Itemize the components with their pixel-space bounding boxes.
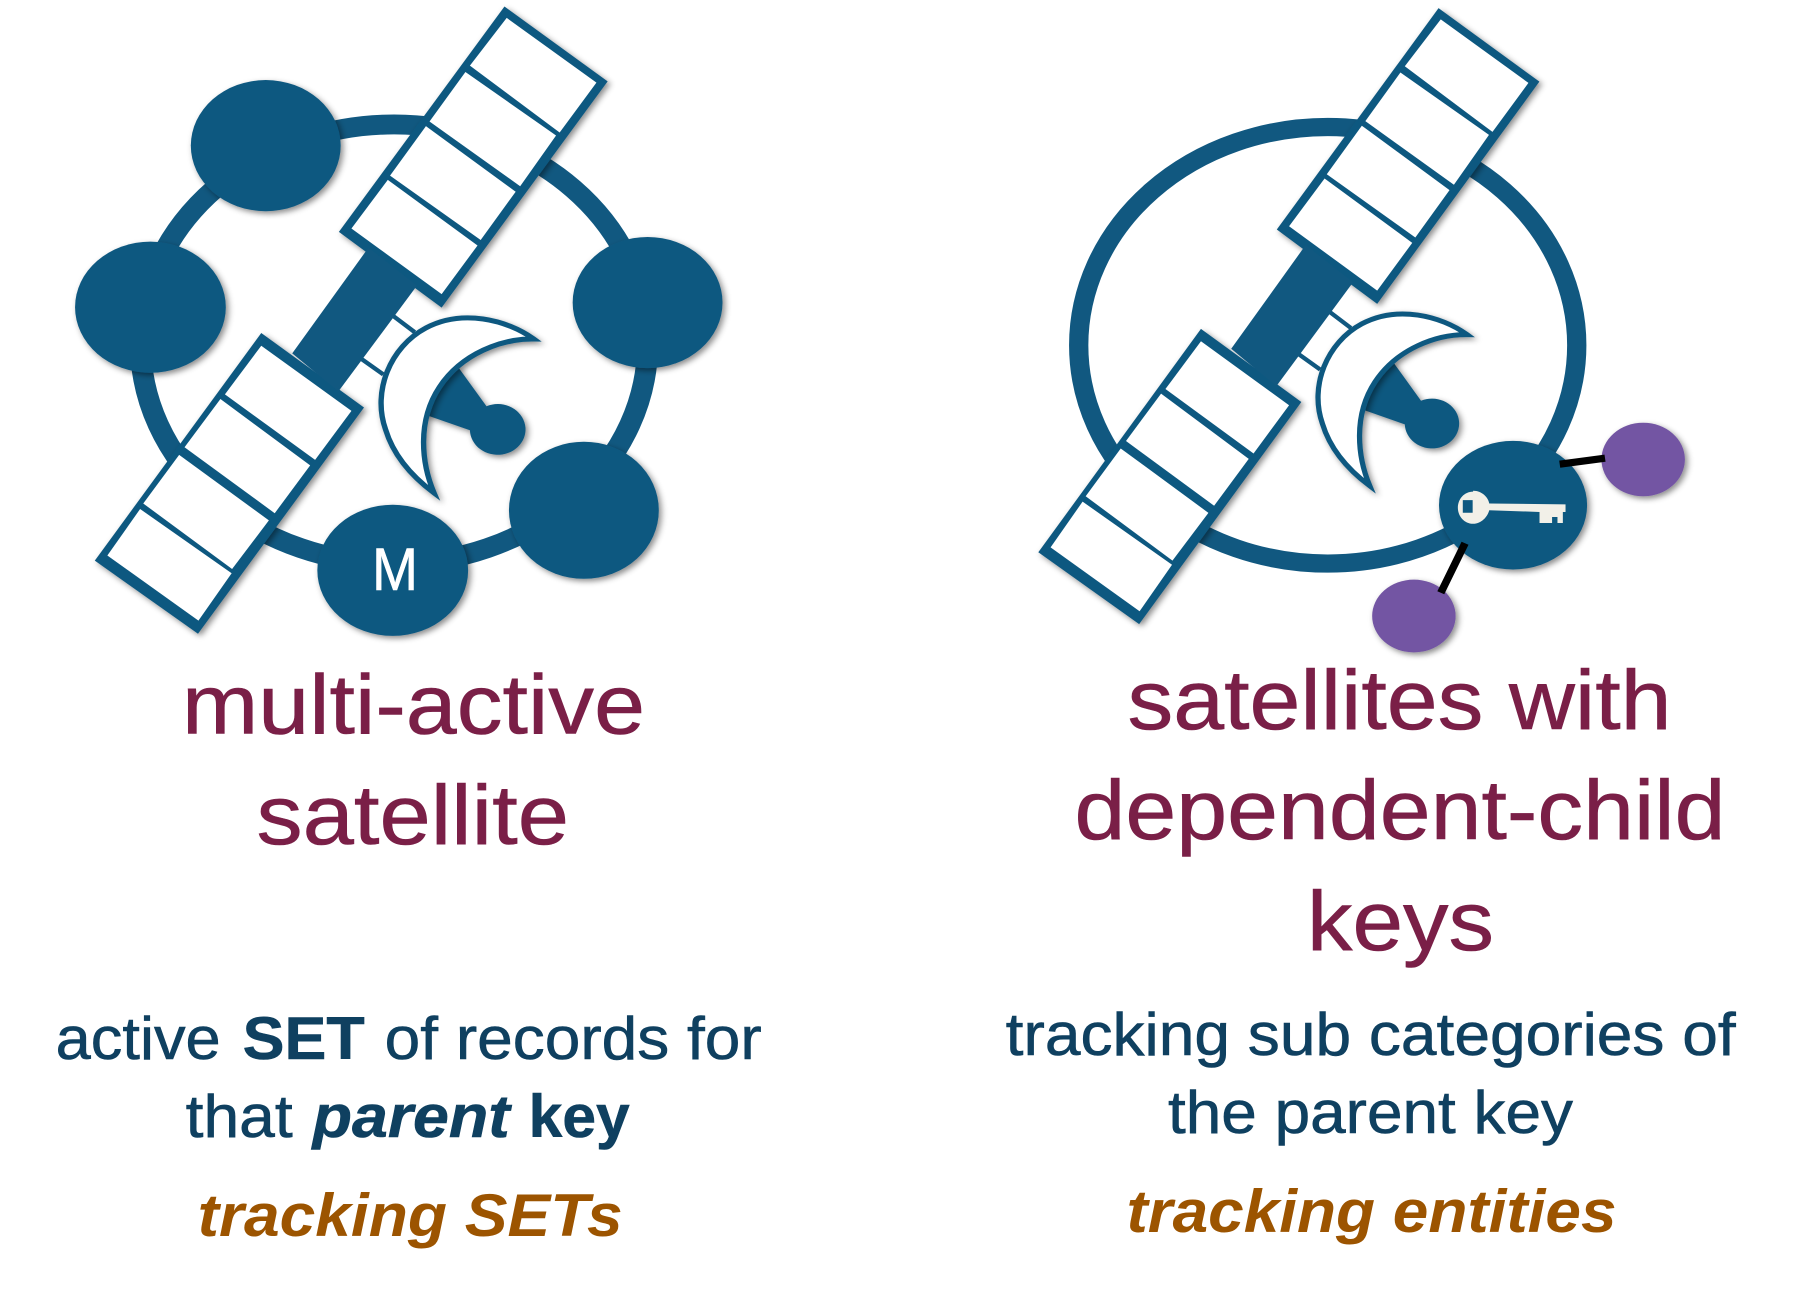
dish [381,318,534,493]
tagline: tracking entities: tracking entities [1126,1178,1616,1245]
satellite body [95,6,608,634]
description: tracking sub categories: tracking sub categories of [1006,1001,1736,1068]
heading: satellites with dependent-child keys [1074,653,1726,968]
icon: satellite with dependent-child key [1038,8,1685,652]
panel: multi-active satellite [56,6,762,1249]
description: active set of records: parent [311,1083,513,1150]
key circle [1439,441,1587,569]
tagline: tracking SETs: tracking SETs [198,1182,623,1249]
description: active set of records: key [529,1083,630,1150]
satellite body [1038,8,1539,624]
purple child circles [1372,423,1685,652]
heading: multi-active satellite [182,658,645,862]
dish feed [425,366,526,455]
heading: multi-active satellite: multi-active [182,658,645,752]
heading: satellites with dependent-child keys: dependent-child [1074,763,1726,857]
icon: multi-active satellite [75,6,723,636]
heading: satellites with dependent-child keys: keys [1307,874,1494,968]
description: tracking sub categories [1006,1001,1736,1146]
orbit ring [1079,127,1577,564]
heading: satellites with dependent-child keys: satellites with [1128,653,1672,747]
description: active set of records: SET [243,1005,365,1072]
description: active set of records [56,1005,762,1150]
icon: key [1458,491,1566,524]
panel: satellites with dependent-child keys [1006,8,1736,1245]
letter M: M [372,536,418,603]
heading: multi-active satellite: satellite [256,768,569,862]
record circles [75,80,723,636]
description: active set of records: of records for [385,1005,762,1072]
orbit ring [141,124,648,564]
connector lines [1441,458,1605,593]
description: active set of records: active [56,1005,221,1072]
description: tracking sub categories: the parent key [1168,1079,1573,1146]
description: active set of records: that [186,1083,293,1150]
